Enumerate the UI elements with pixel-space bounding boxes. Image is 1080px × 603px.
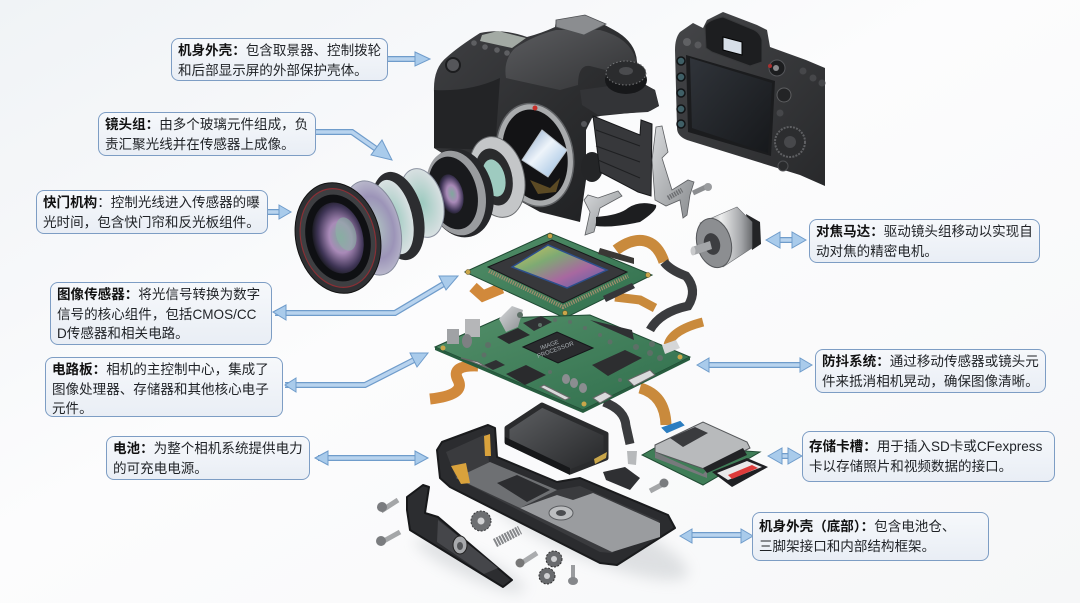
label: 图像传感器 (50, 282, 272, 345)
label: 对焦马达: 动对焦的精密电机。 (816, 244, 938, 258)
label: 镜头组 (98, 112, 316, 156)
label: 机身外壳: 和后部显示屏的外部保护壳体。 (178, 62, 368, 78)
label: 快门机构: 光时间，包含快门帘和反光板组件。 (43, 214, 260, 230)
label: 电池: 的可充电电源。 (113, 460, 208, 476)
label: 镜头组: 镜头组：由多个玻璃元件组成，负 (105, 117, 308, 132)
main circuit board (435, 306, 690, 413)
label: 电路板: 元件。 (52, 401, 93, 416)
screws, gears and spring (376, 451, 668, 585)
camera back view (675, 12, 826, 186)
label: 存储卡槽: 存储卡槽：用于插入SD卡或CFexpress (809, 439, 1042, 454)
focus motor (690, 207, 761, 272)
main circuit board: IMAGE (540, 340, 560, 352)
label: 图像传感器: 图像传感器：将光信号转换为数字 (57, 287, 260, 302)
lens group (284, 131, 533, 302)
label: 防抖系统: 件来抵消相机晃动，确保图像清晰。 (822, 374, 1039, 388)
label: 电路板 (45, 357, 283, 417)
bottom tray housing (437, 425, 675, 565)
label: 快门机构: 快门机构：控制光线进入传感器的曝 (43, 195, 260, 210)
label: 电路板: 图像处理器、存储器和其他核心电子 (52, 382, 269, 396)
label: 机身外壳（底部）: 机身外壳（底部）：包含电池仓、 (759, 519, 955, 534)
memory card slot (642, 422, 768, 487)
arrows (268, 52, 812, 543)
label: 电池: 电池：为整个相机系统提供电力 (113, 441, 303, 456)
label: 电池 (106, 436, 310, 480)
label: 镜头组: 责汇聚光线并在传感器上成像。 (105, 136, 295, 152)
label: 机身外壳（底部） (752, 512, 989, 561)
label: 对焦马达 (809, 219, 1040, 263)
label: 电路板: 电路板：相机的主控制中心，集成了 (52, 362, 269, 377)
label: 防抖系统 (815, 349, 1046, 393)
label: 存储卡槽: 卡以存储照片和视频数据的接口。 (809, 458, 1012, 474)
image sensor board (465, 233, 652, 318)
label: 机身外壳 (171, 38, 388, 81)
label: 快门机构 (36, 190, 268, 234)
label: 图像传感器: D传感器和相关电路。 (57, 326, 189, 341)
label: 防抖系统: 防抖系统：通过移动传感器或镜头元 (822, 354, 1039, 369)
label: 机身外壳: 机身外壳：包含取景器、控制拨轮 (178, 43, 381, 58)
camera body front (434, 15, 659, 222)
label: 机身外壳（底部）: 三脚架接口和内部结构框架。 (759, 538, 935, 554)
shutter assembly and linkages (584, 116, 712, 235)
label: 图像传感器: 信号的核心组件，包括CMOS/CC (57, 306, 256, 322)
main circuit board: PROCESSOR (537, 341, 575, 360)
label: 对焦马达: 对焦马达：驱动镜头组移动以实现自 (816, 224, 1033, 239)
label: 存储卡槽 (802, 431, 1055, 482)
bottom plate (407, 485, 512, 587)
flexible ribbon cables (430, 240, 703, 444)
battery (505, 405, 607, 475)
